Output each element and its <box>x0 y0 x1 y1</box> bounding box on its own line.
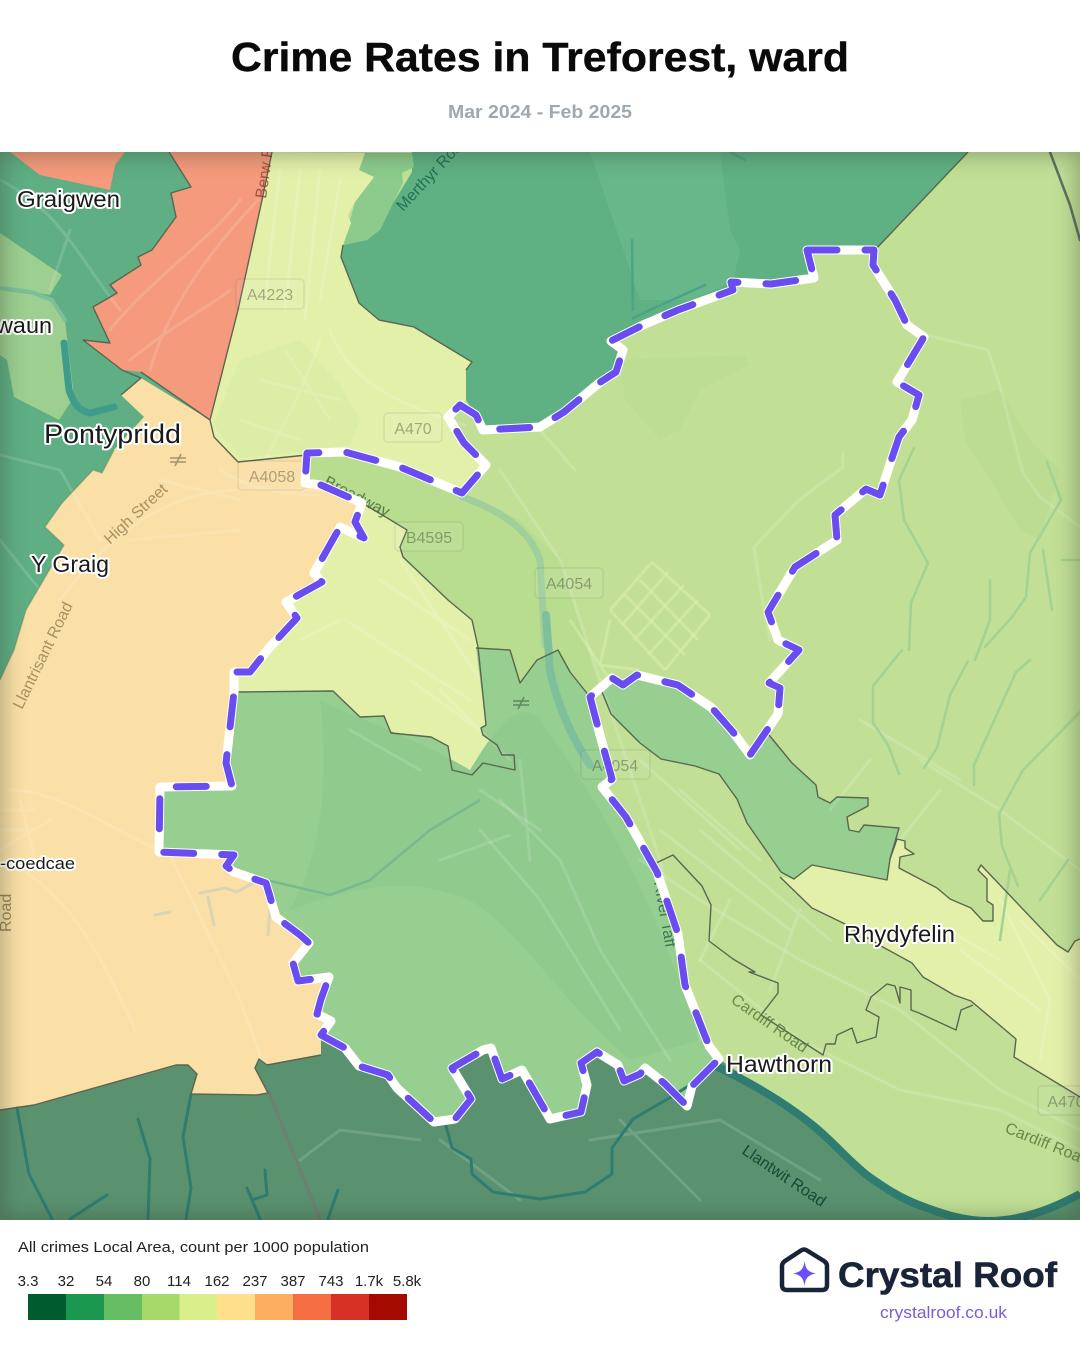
street name labels: Merthyr Road <box>393 132 472 215</box>
legend scale values <box>18 1273 422 1290</box>
street name labels: Cardiff Road <box>728 991 811 1057</box>
legend scale values: 3.3 <box>18 1273 38 1290</box>
streams north <box>632 152 745 318</box>
patch: park <box>213 340 360 458</box>
area: yellow Pontypridd <box>0 378 364 1110</box>
icon: house with star <box>782 1250 827 1290</box>
river Taff <box>462 497 545 645</box>
street name labels: Broadway <box>321 473 392 521</box>
website url: crystalroof.co.uk <box>880 1304 1008 1322</box>
street name labels <box>0 132 1080 1211</box>
area: green ward east lobe <box>602 675 899 880</box>
street name labels: Llantrisant Road <box>10 600 77 712</box>
legend scale values: 162 <box>204 1273 230 1290</box>
road number labels <box>236 279 1080 1115</box>
legend scale values: 743 <box>318 1273 344 1290</box>
area: green north <box>341 152 968 430</box>
street name labels: High Street <box>101 481 172 548</box>
legend title: All crimes Local Area, count per 1000 population <box>18 1239 369 1256</box>
place names: Hawthorn <box>726 1051 832 1077</box>
area: yellow Rhydyfelin <box>780 839 1080 1097</box>
place names: -coedcae <box>0 854 75 873</box>
area: green ward south <box>159 648 719 1122</box>
place names: Graigwen <box>17 186 120 212</box>
area: west green <box>0 152 202 680</box>
area: light green north-west <box>0 233 62 295</box>
ward outlines <box>0 152 1080 1110</box>
legend scale values: 237 <box>242 1273 268 1290</box>
river edge south <box>716 1066 1080 1221</box>
area: coral Graigwen east <box>83 152 272 420</box>
legend scale values: 387 <box>280 1273 306 1290</box>
road number labels: B4595 <box>406 530 452 547</box>
road number labels: A4054 <box>592 758 638 775</box>
base area: light green east <box>0 152 1080 1220</box>
place names: Pontypridd <box>44 419 181 449</box>
legend scale values: 80 <box>134 1273 150 1290</box>
title: Crime Rates in Treforest, ward <box>231 34 849 80</box>
streams east <box>873 448 1080 940</box>
legend scale values: 5.8k <box>393 1273 422 1290</box>
wordmark: Crystal Roof <box>838 1256 1057 1295</box>
road number labels: A4223 <box>247 287 293 304</box>
legend scale values: 54 <box>96 1273 112 1290</box>
legend <box>18 1239 422 1320</box>
area: dark green south <box>0 1035 1080 1220</box>
grey tracks <box>155 152 1080 1219</box>
area: light green Trallwn <box>0 290 74 420</box>
railway station icons <box>170 454 529 709</box>
logo: Crystal Roof <box>782 1250 1057 1322</box>
street name labels: River Taff <box>650 880 679 949</box>
road network <box>0 170 1080 1200</box>
place names: Rhydyfelin <box>844 921 955 947</box>
road number labels: A470 <box>394 421 432 438</box>
legend scale values: 32 <box>58 1273 74 1290</box>
darker patches east <box>960 390 1060 540</box>
street name labels: Llantwit Road <box>739 1142 829 1211</box>
Treforest street grid <box>570 562 710 680</box>
area: yellow-green Treforest west <box>238 506 489 770</box>
subtitle: date range: Mar 2024 - Feb 2025 <box>448 102 632 122</box>
street name labels: Berw Rd <box>253 136 279 200</box>
patch: lighter green north <box>590 152 740 300</box>
river ring west <box>0 288 65 320</box>
area: Broadway strip green <box>305 452 600 697</box>
legend scale values: 1.7k <box>355 1273 384 1290</box>
streams south <box>17 1085 690 1219</box>
place names <box>0 186 955 1077</box>
legend colour ramp <box>28 1294 407 1320</box>
place names: Y Graig <box>31 551 109 577</box>
ward boundary: Treforest <box>159 250 924 1122</box>
stream in ward south <box>266 800 480 895</box>
area: coral north-west corner <box>10 152 125 190</box>
area: yellow-green park <box>210 152 486 493</box>
road number labels: A4058 <box>249 469 295 486</box>
river pool west <box>64 343 114 413</box>
road number labels: A4054 <box>546 576 592 593</box>
legend scale values: 114 <box>167 1273 191 1290</box>
patch: darker green ward <box>391 731 514 774</box>
area: lighter slice north <box>343 153 414 245</box>
